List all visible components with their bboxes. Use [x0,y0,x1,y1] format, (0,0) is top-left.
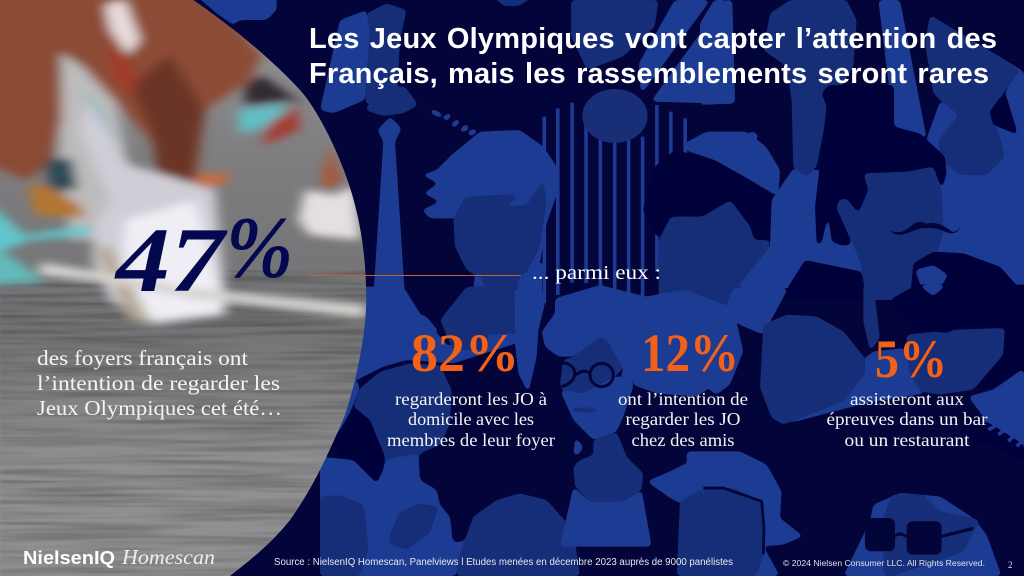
page number: 2 [1008,560,1012,570]
stripes [431,111,477,135]
silhouettes: lower left [320,287,580,576]
headline [309,23,997,90]
stat: 12%: ont l’intention de [618,389,748,409]
dark hair [643,150,786,253]
silhouettes: left top corner shapes [193,0,407,113]
main stat 47%: % [226,200,293,297]
stat: 5%: épreuves dans un bar [826,409,988,429]
big bright backing [783,348,970,425]
logo [23,545,215,569]
hat left part [647,451,703,576]
stat: 12%: chez des amis [632,430,734,450]
moustache [890,222,960,235]
stat: 82%: regarderont les JO à [395,389,547,409]
stat: 12%: regarder les JO [626,409,740,429]
among them label: ... parmi eux : [532,262,661,284]
headline: Français, mais les rassemblements seront rares [309,58,989,90]
silhouette: glasses woman [515,257,740,547]
silhouettes: top right [700,0,1024,300]
silhouettes: top middle [490,0,786,307]
sleeve stripes [967,368,1024,463]
tie [373,117,405,317]
photo: runners [0,0,370,576]
stat: 82%: membres de leur foyer [387,430,555,450]
headline: Les Jeux Olympiques vont capter l’attention des [309,23,997,55]
copyright: © 2024 Nielsen Consumer LLC. All Rights Reserved. [783,558,985,568]
stat: 12% [618,323,748,450]
stat: 5% [826,329,988,450]
stat: 82%: 82% [411,323,519,383]
afro [890,285,1024,391]
logo: NielsenIQ [23,548,115,568]
round glasses [562,363,613,387]
beret [685,132,780,197]
stat: 5%: assisteront aux [850,389,964,409]
silhouettes: lower right [680,285,1024,576]
main stat 47%: 47 [114,209,229,311]
blur white leg [80,100,225,325]
source note: Source : NielsenIQ Homescan, Panelviews l Etudes menées en décembre 2023 auprès de 9000 panélistes [274,557,733,568]
main stat 47% [114,200,293,311]
main stat description [37,346,282,420]
main stat description: l’intention de regarder les [37,371,280,395]
stat: 12%: 12% [641,323,739,383]
hat [687,451,803,576]
main stat description: des foyers français ont [37,346,248,370]
stat: 5%: 5% [875,329,947,389]
teal shoe [238,105,285,135]
stat: 82%: domicile avec les [408,409,534,429]
man face [837,167,943,300]
connector line [308,275,521,276]
road texture [0,270,370,576]
main stat description: Jeux Olympiques cet été… [37,396,282,420]
silhouette: hair person and tie [365,87,558,343]
stat: 5%: ou un restaurant [844,430,970,450]
stat: 82% [387,323,555,450]
logo: Homescan [121,545,215,569]
woman with sunglasses [843,493,1002,576]
